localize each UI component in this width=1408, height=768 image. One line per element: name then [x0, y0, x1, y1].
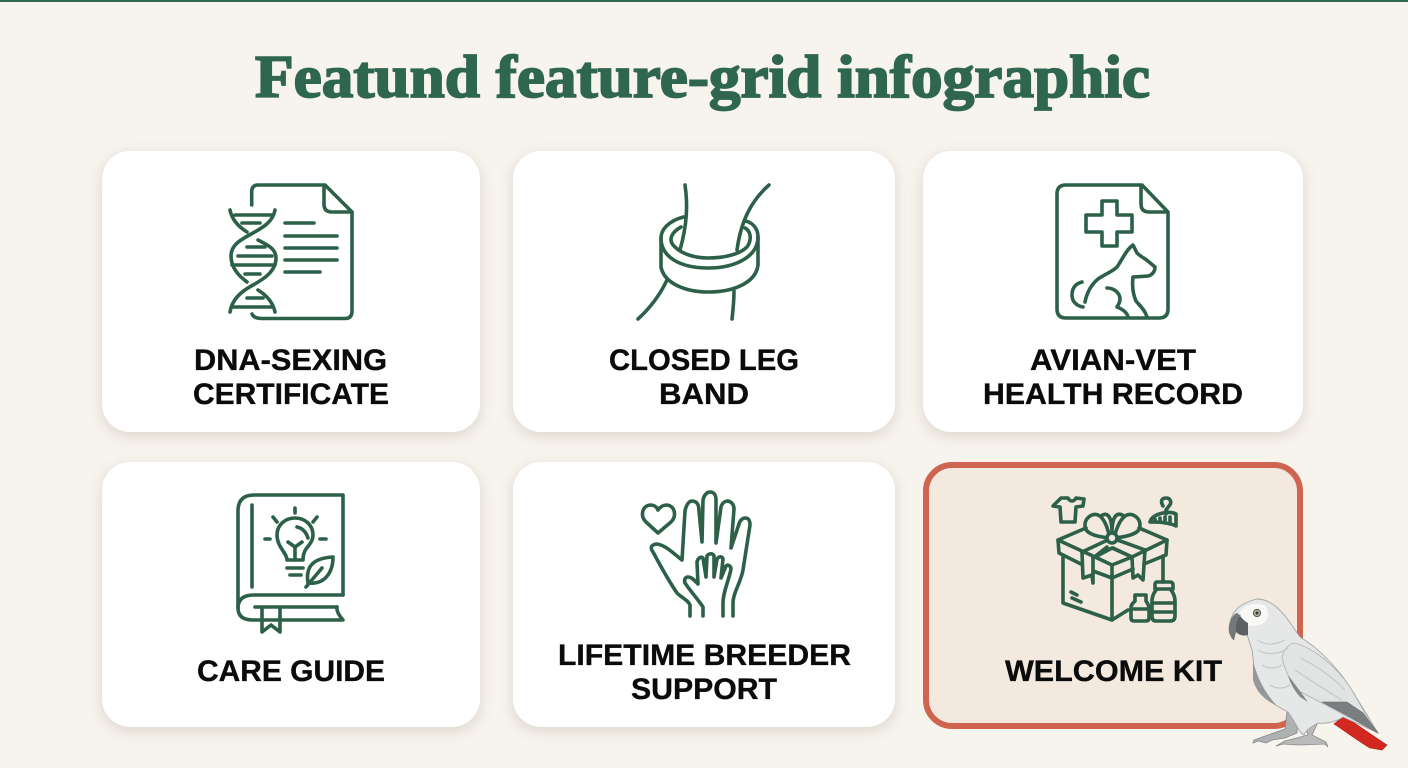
- illustration: African grey parrot: [1229, 599, 1387, 750]
- label: BAND: [659, 378, 749, 411]
- label: [558, 639, 851, 706]
- label: LIFETIME BREEDER: [558, 639, 851, 672]
- label: WELCOME KIT: [1005, 655, 1222, 688]
- label: SUPPORT: [631, 673, 777, 706]
- icon: hands and heart: [643, 492, 750, 616]
- label: [983, 344, 1243, 411]
- label: DNA-SEXING: [194, 344, 387, 377]
- title: Featund feature-grid infographic: [255, 44, 1150, 110]
- label: [609, 344, 799, 411]
- label: HEALTH RECORD: [983, 378, 1243, 411]
- label: AVIAN-VET: [1030, 344, 1196, 377]
- label: [193, 344, 389, 411]
- label: CLOSED LEG: [609, 344, 799, 377]
- icon: medical record with pet: [1057, 185, 1168, 318]
- icon: DNA and document: [230, 185, 352, 318]
- icon: leg band: [638, 185, 769, 319]
- panel: care guide: [102, 462, 480, 727]
- panel: lifetime breeder support: [513, 462, 895, 727]
- panel: DNA-sexing certificate: [102, 151, 480, 432]
- label: CARE GUIDE: [197, 655, 385, 688]
- icon: book with lightbulb: [238, 495, 343, 632]
- label: CERTIFICATE: [193, 378, 389, 411]
- panel: closed leg band: [513, 151, 895, 432]
- panel: welcome kit (highlighted): [926, 465, 1300, 726]
- panel: avian-vet health record: [923, 151, 1303, 432]
- icon: gift box and accessories: [1053, 498, 1176, 621]
